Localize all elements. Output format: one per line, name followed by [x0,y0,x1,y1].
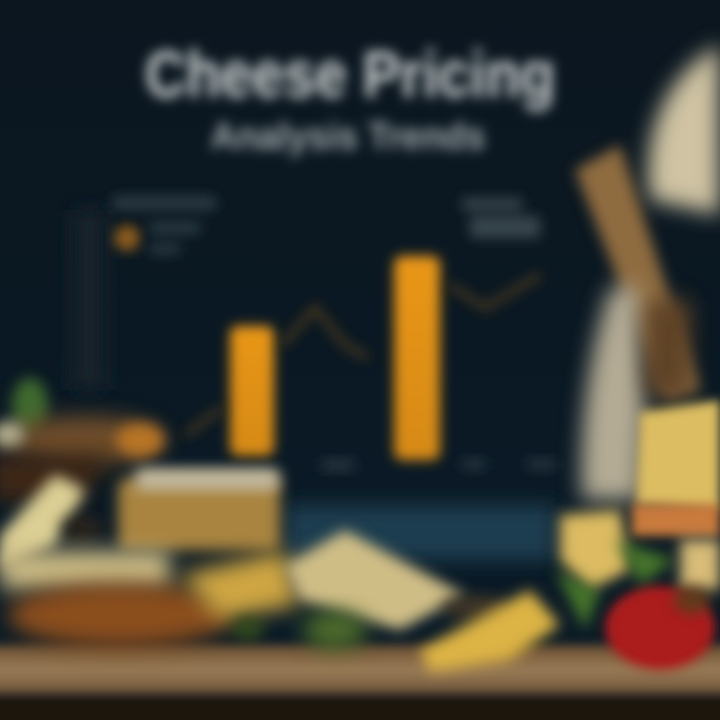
glass jar [118,468,280,550]
legend marker [114,225,140,251]
trend line [185,275,540,435]
blue table band [285,505,555,560]
orange piece [116,423,164,457]
bowl body [0,455,110,505]
chart [72,196,556,472]
lower cheese right [680,540,720,590]
cheese top [636,400,720,510]
yellow wedge [420,590,560,672]
bread crust [8,583,232,647]
basil leaves [555,540,675,630]
bar 2 [394,256,440,460]
table surface [0,645,720,695]
wrapped stick [581,285,645,500]
cheese block right [560,400,720,590]
jar rim [135,468,280,490]
yellow cheese center [180,550,300,620]
green herb small [232,616,264,640]
tomato highlight [674,586,710,614]
dark stick [645,300,690,395]
table bottom edge [0,697,720,720]
legend text right [462,198,540,238]
jar body [118,478,280,550]
breadsticks [575,145,700,400]
breadstick and bread right [575,45,720,500]
cheese wedge left [0,475,85,570]
bar 1 [230,326,274,456]
dark olives [60,514,104,542]
subtitle: Analysis Trends [210,116,486,158]
bowl contents [5,416,165,464]
bread loaf [648,45,720,215]
dark slab detail [441,595,509,619]
herb [12,378,48,434]
lower cheese [560,510,630,590]
cheese slab [285,530,465,630]
green herb center [303,610,367,650]
axis labels [322,458,556,472]
tomato [605,586,715,670]
legend text left [112,196,216,254]
white cheese [0,421,24,449]
title: Cheese Pricing [145,37,555,111]
pale plate [0,550,170,590]
chart axis [72,210,106,390]
cheese rind stripe [632,504,720,536]
left bowl and herbs [0,378,165,505]
foreground food [0,475,715,672]
wooden table [0,645,720,720]
